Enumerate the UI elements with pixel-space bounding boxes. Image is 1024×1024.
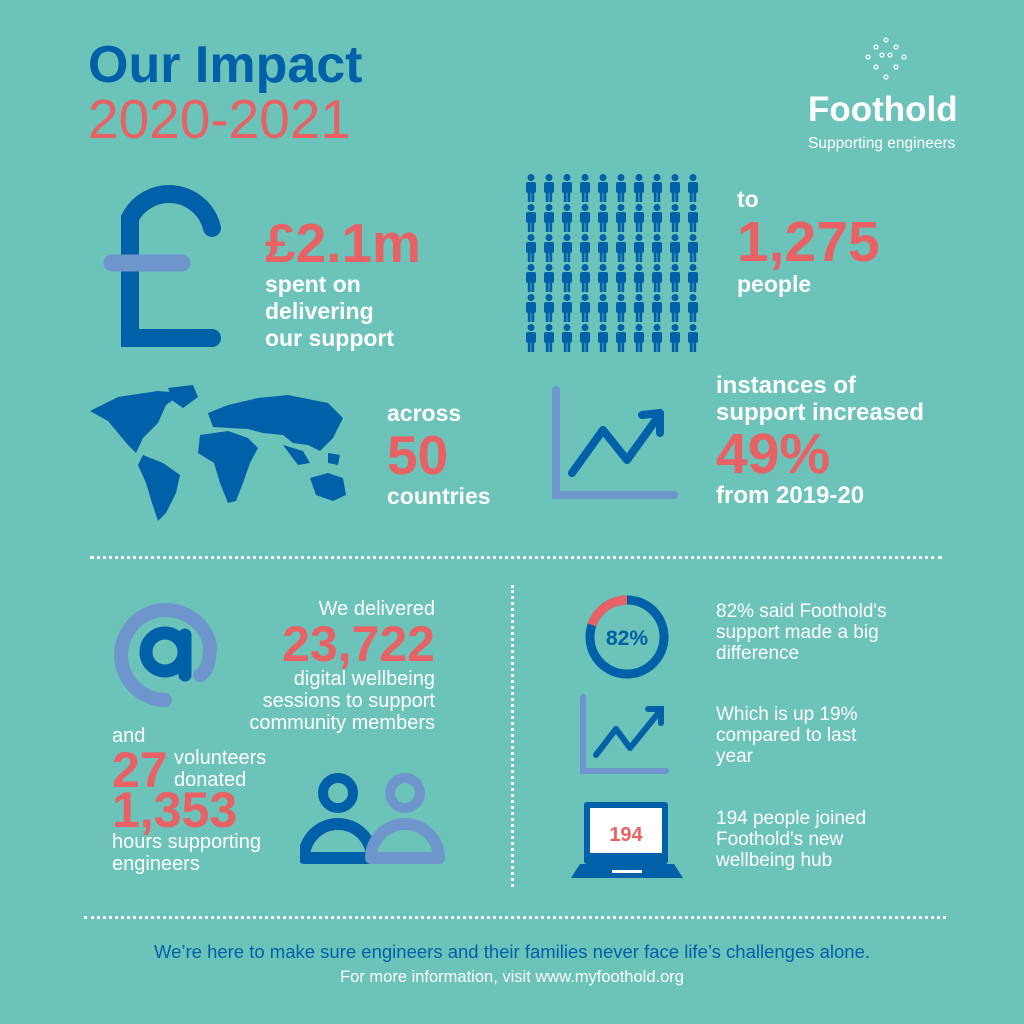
text: 194 people: 194 people joined — [716, 808, 866, 829]
icon: donut 82% — [586, 596, 668, 678]
stat: people: 1,275 — [737, 210, 880, 274]
stat: volunteers — [112, 725, 266, 875]
icon: people grid — [526, 174, 698, 352]
stat: countries: countries — [387, 483, 491, 509]
stat: volunteers: hours supporting — [112, 831, 261, 853]
stat: sessions: We delivered — [319, 598, 435, 620]
icon: at sign — [114, 603, 217, 707]
stat: sessions: community members — [249, 712, 435, 734]
stat: volunteers: donated — [174, 769, 246, 791]
stat: spent: spent on — [265, 271, 361, 297]
icon: pound — [104, 185, 221, 347]
icon: world map — [90, 385, 346, 521]
stat: spent: delivering — [265, 298, 374, 324]
stat: spent: £2.1m — [265, 212, 421, 274]
stat: volunteers: engineers — [112, 853, 200, 875]
icon: donut 82%: 82% — [606, 627, 648, 650]
stat: volunteers: 1,353 — [112, 782, 237, 838]
text: 194 people: wellbeing hub — [716, 850, 832, 871]
logo — [808, 37, 958, 152]
stat: countries: across — [387, 400, 461, 426]
stat: people: people — [737, 271, 811, 297]
footer: For more information, visit www.myfoothold.org — [340, 968, 684, 986]
stat: people — [737, 186, 880, 297]
footer: We’re here to make sure engineers and their families never face life’s challenges alone. — [154, 941, 870, 962]
footer — [154, 941, 870, 986]
stat: increased — [716, 372, 924, 509]
stat: volunteers: 27 — [112, 742, 168, 798]
icon: laptop 194 — [571, 802, 683, 878]
stat: increased: 49% — [716, 422, 830, 486]
stat: sessions — [249, 598, 435, 734]
text: 194 people — [716, 808, 866, 871]
title: Our Impact — [88, 36, 362, 94]
stat: spent: our support — [265, 325, 394, 351]
stat: increased: support increased — [716, 399, 924, 426]
text: 82%: 82% said Foothold's — [716, 601, 887, 622]
stat: increased: instances of — [716, 372, 856, 399]
text: up 19%: year — [716, 746, 753, 767]
stat: sessions: digital wellbeing — [294, 668, 435, 690]
text: 82%: difference — [716, 643, 799, 664]
stat: increased: from 2019-20 — [716, 482, 864, 509]
stat: volunteers: and — [112, 725, 145, 747]
text: up 19% — [716, 704, 858, 767]
text: up 19%: compared to last — [716, 725, 856, 746]
text: 194 people: Foothold's new — [716, 829, 843, 850]
stat: volunteers: volunteers — [174, 747, 266, 769]
text: 82% — [716, 601, 887, 664]
logo: Supporting engineers — [808, 135, 955, 152]
icon: small chart — [580, 694, 669, 774]
stat: spent — [265, 212, 421, 351]
icon: people pair — [300, 773, 445, 864]
stat: people: to — [737, 186, 759, 212]
icon: chart — [552, 386, 678, 499]
text: 82%: support made a big — [716, 622, 879, 643]
stat: countries — [387, 400, 491, 509]
icon: laptop 194: 194 — [609, 824, 644, 846]
title: 2020-2021 — [88, 88, 351, 150]
stat: sessions: 23,722 — [282, 616, 435, 672]
title — [88, 36, 362, 150]
logo: Foothold — [808, 90, 958, 129]
stat: countries: 50 — [387, 424, 448, 486]
text: up 19%: Which is up 19% — [716, 704, 858, 725]
stat: sessions: sessions to support — [263, 690, 435, 712]
